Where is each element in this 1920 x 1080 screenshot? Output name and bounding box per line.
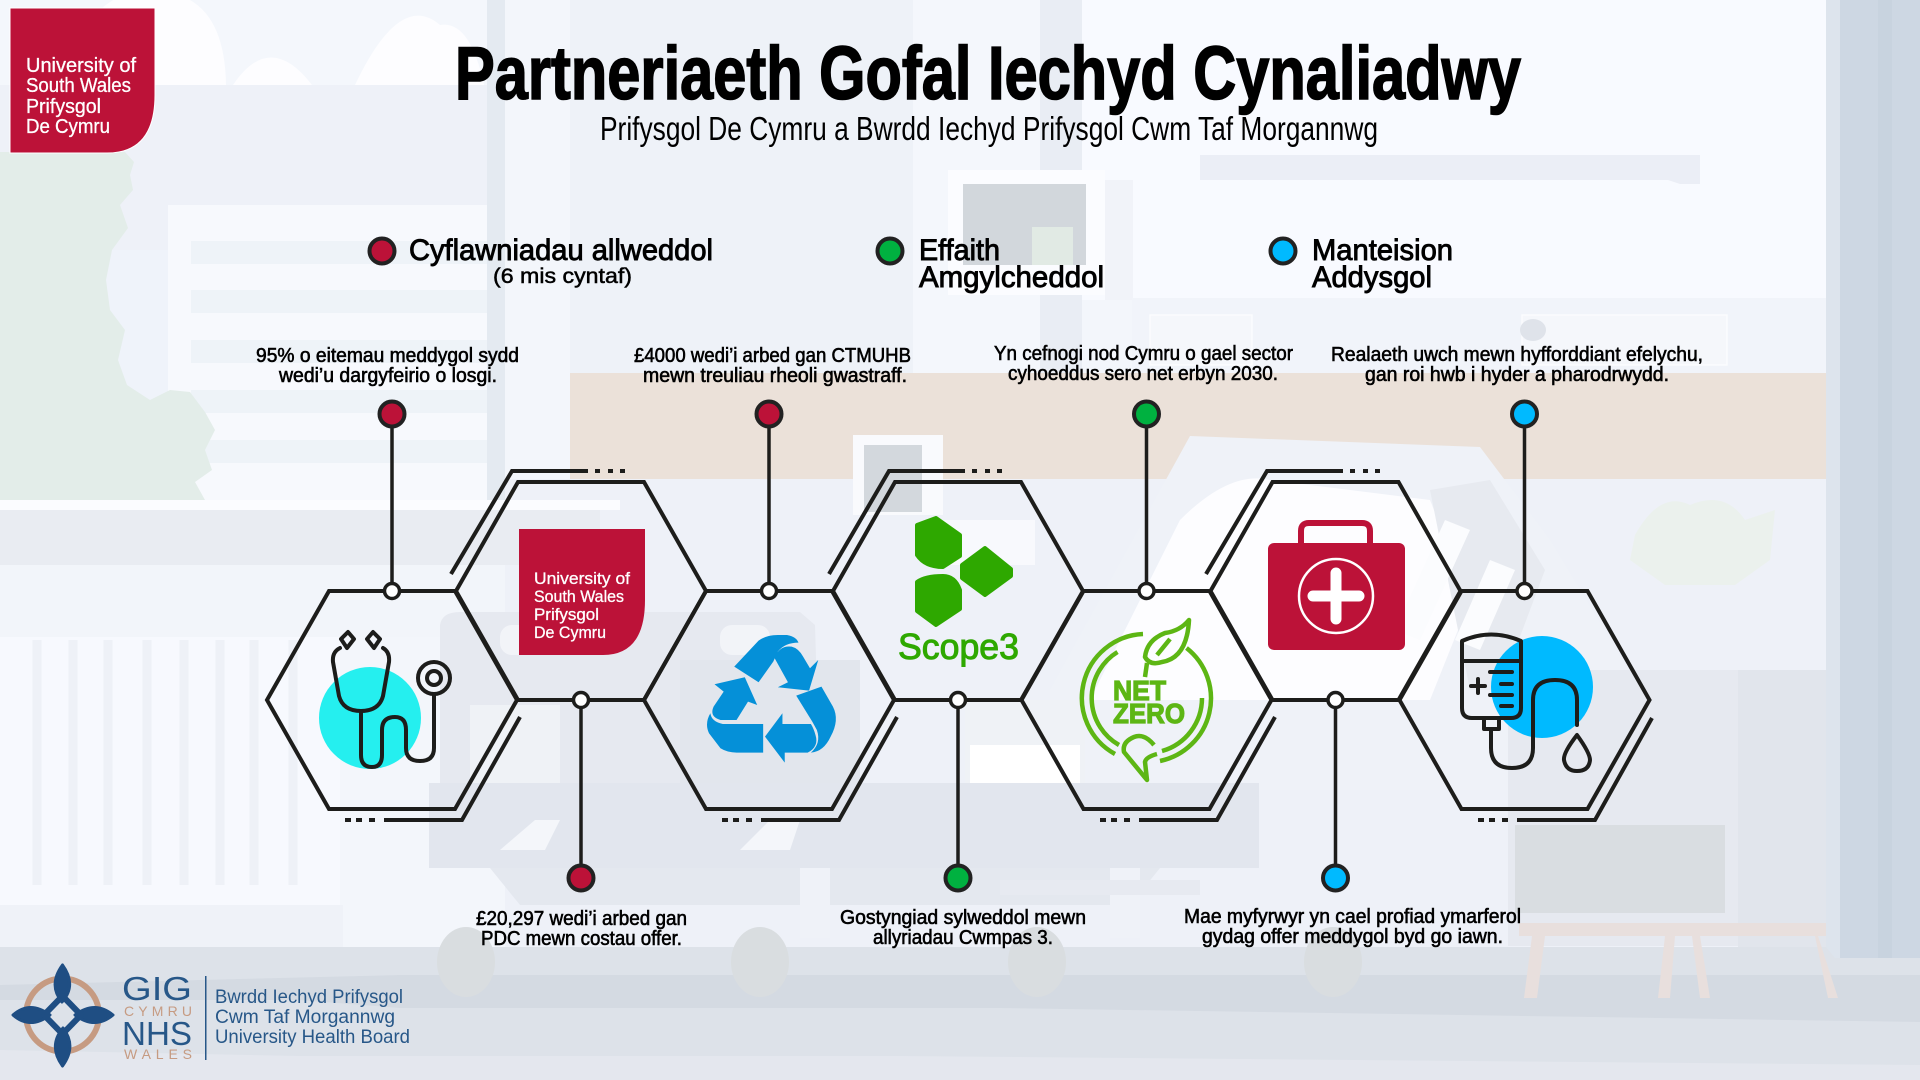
logo: NHS Wales health board: NHS [122, 1015, 192, 1052]
hexagon: university logo [451, 471, 706, 700]
logo: NHS Wales health board [13, 965, 410, 1066]
icon: stethoscope [319, 632, 450, 769]
hexagon: net zero [1022, 591, 1275, 820]
logo: NHS Wales health board: GIG [122, 970, 192, 1007]
background: tree [0, 152, 215, 500]
text: 95 percent diverted: 95% o eitemau meddygol sydd [256, 345, 519, 367]
icon: recycling arrows [707, 635, 836, 763]
icon: first aid kit [1268, 523, 1405, 650]
icon: university logo: South Wales [534, 587, 624, 606]
legend: key achievements: (6 mis cyntaf) [493, 265, 632, 288]
background: bed head panel [440, 612, 860, 790]
text: 4000 pounds saved: £4000 wedi’i arbed gan CTMUHB [634, 345, 911, 367]
logo: NHS Wales health board: WALES [124, 1046, 192, 1062]
pin: university [568, 692, 594, 890]
background: bed frame [429, 783, 1259, 938]
logo: NHS Wales health board: CYMRU [124, 1003, 192, 1019]
text: 95 percent diverted [256, 345, 519, 387]
legend: educational benefits: Addysgol [1312, 261, 1432, 294]
text: scope 3 reductions: allyriadau Cwmpas 3. [873, 927, 1053, 949]
background: radiator [0, 637, 343, 947]
text: net zero goal: cyhoeddus sero net erbyn 2030. [1008, 363, 1278, 385]
title: Partneriaeth Gofal Iechyd Cynaliadwy [455, 31, 1521, 115]
text: scope 3 reductions: Gostyngiad sylweddol mewn [840, 907, 1086, 929]
text: student experience [1184, 906, 1521, 948]
background: equipment stand [853, 435, 1035, 565]
background: wall monitor [948, 170, 1133, 300]
icon: university logo: De Cymru [534, 623, 606, 642]
pin: net zero [1134, 402, 1159, 598]
background: bed wheels [437, 927, 1362, 997]
text: student experience: Mae myfyrwyr yn cael profiad ymarferol [1184, 906, 1521, 928]
icon: net zero badge [1082, 620, 1211, 780]
hexagon: stethoscope [267, 591, 520, 820]
background: floor [0, 947, 1920, 1080]
background: curtain [1826, 0, 1920, 960]
icon: university logo: University of [534, 569, 630, 588]
background: window sill [0, 500, 620, 637]
hexagon: scope 3 [829, 471, 1083, 700]
text: 4000 pounds saved [634, 345, 911, 387]
icon: university logo: Prifysgol [534, 605, 599, 624]
text: 4000 pounds saved: mewn treuliau rheoli gwastraff. [643, 365, 907, 387]
icon: Scope3 logo [898, 518, 1019, 667]
background: plant [1630, 500, 1775, 585]
logo: University of South Wales [10, 8, 155, 153]
legend: educational benefits: Manteision [1312, 234, 1453, 267]
icon: IV drip [1462, 634, 1593, 771]
background: right cabinet [1508, 670, 1826, 960]
text: 95 percent diverted: wedi’u dargyfeirio o losgi. [278, 365, 497, 387]
hexagon: IV drip [1400, 591, 1652, 820]
icon: university logo [519, 529, 645, 655]
background: wall panel with sockets [1132, 298, 1826, 373]
text: 20297 pounds saved: PDC mewn costau offer. [481, 928, 682, 950]
hexagon: recycling [644, 591, 897, 820]
logo: University of South Wales: De Cymru [26, 116, 110, 138]
logo: NHS Wales health board: Cwm Taf Morgannwg [215, 1007, 395, 1028]
background: beige wall band [570, 373, 1826, 479]
icon: Scope3 logo: Scope3 [898, 626, 1019, 667]
text: net zero goal: Yn cefnogi nod Cymru o gael sector [994, 343, 1293, 365]
text: scope 3 reductions [840, 907, 1086, 949]
background: distant building [80, 205, 487, 500]
text: simulation realism: gan roi hwb i hyder a pharodrwydd. [1365, 364, 1669, 386]
background: sky and clouds [0, 0, 487, 265]
subtitle: Prifysgol De Cymru a Bwrdd Iechyd Prifysgol Cwm Taf Morgannwg [600, 110, 1378, 147]
pin: recycling [756, 402, 782, 598]
icon: net zero badge: NET [1113, 675, 1166, 706]
logo: NHS Wales health board: Bwrdd Iechyd Prifysgol [215, 987, 403, 1008]
logo: NHS Wales health board: University Health Board [215, 1027, 410, 1048]
text: net zero goal [994, 343, 1293, 385]
pin: scope 3 [946, 692, 970, 890]
logo: University of South Wales: Prifysgol [26, 96, 101, 118]
text: simulation realism [1331, 344, 1703, 386]
emblem: celtic knot [13, 965, 113, 1066]
legend: environmental impact [878, 234, 1104, 294]
pin: stethoscope [380, 402, 404, 598]
legend: environmental impact: Effaith [919, 234, 1000, 267]
background: window frame columns [487, 0, 1826, 500]
background: side table [1519, 923, 1838, 998]
text: 20297 pounds saved [476, 908, 687, 950]
pin: first aid kit [1323, 692, 1348, 890]
text: simulation realism: Realaeth uwch mewn hyfforddiant efelychu, [1331, 344, 1703, 366]
pin: IV drip [1512, 402, 1537, 598]
hexagon: first aid kit [1206, 471, 1460, 700]
background: wall shelf [1200, 155, 1700, 184]
text: student experience: gydag offer meddygol byd go iawn. [1202, 926, 1503, 948]
legend: environmental impact: Amgylcheddol [919, 261, 1104, 294]
background: mattress and raised backrest [965, 436, 1640, 820]
logo: University of South Wales: University of [26, 55, 136, 77]
text: 20297 pounds saved: £20,297 wedi’i arbed gan [476, 908, 687, 930]
legend: educational benefits [1270, 234, 1453, 294]
background: lower wall [505, 479, 1826, 949]
legend: key achievements: Cyflawniadau allweddol [409, 234, 713, 267]
hexagon chain [267, 471, 1652, 820]
logo: University of South Wales: South Wales [26, 75, 131, 97]
legend: key achievements [370, 234, 713, 288]
icon: net zero badge: ZERO [1113, 698, 1185, 729]
